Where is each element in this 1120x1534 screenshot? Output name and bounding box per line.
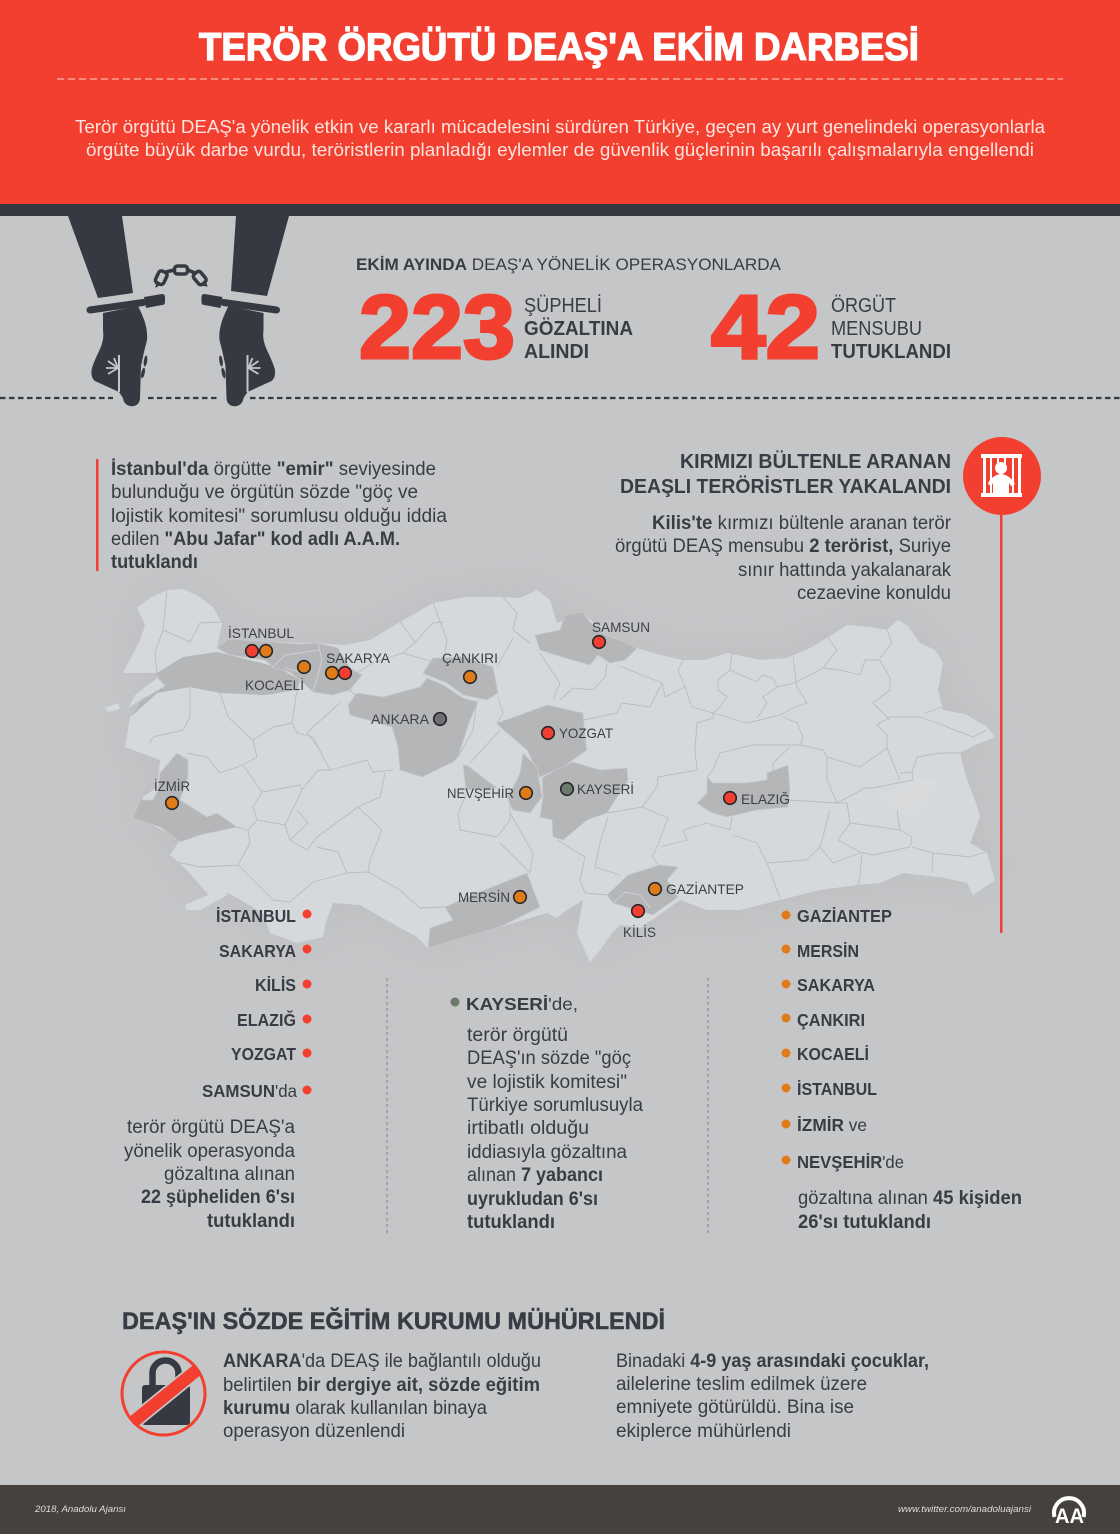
panel: right list: İSTANBUL [797, 1079, 877, 1099]
panel: left list: SAMSUN'da [202, 1081, 297, 1101]
stats heading: EKİM AYINDA DEAŞ'A YÖNELİK OPERASYONLARDA [356, 255, 782, 274]
left cuff and hand [90, 294, 165, 406]
map point labels: ÇANKIRI [442, 650, 498, 666]
panel: middle Kayseri text: DEAŞ'ın sözde "göç [467, 1048, 631, 1069]
text: operation in Ankara [223, 1351, 541, 1442]
stat: 223 detained: 223 [359, 278, 515, 378]
intro text: örgüte büyük darbe vurdu, teröristlerin planladığı eylemler de güvenlik güçlerinin başarılı çalışmalarıyla engellendi [86, 140, 1034, 160]
map point labels: SAKARYA [326, 650, 391, 666]
text: children delivered: Binadaki 4-9 yaş arasındaki çocuklar, [616, 1351, 929, 1372]
panel: left list: KİLİS [255, 975, 296, 995]
panel: right list: NEVŞEHİR'de [797, 1152, 904, 1172]
panel: left list: tutuklandı [207, 1211, 295, 1232]
right cuff and hand [202, 294, 276, 406]
map point labels: İSTANBUL [228, 624, 294, 641]
heading: red bulletin: DEAŞLI TERÖRİSTLER YAKALANDI [620, 475, 951, 498]
highlighted provinces [133, 612, 790, 948]
map point labels: KAYSERİ [577, 780, 634, 797]
panel: left list: ELAZIĞ [237, 1009, 296, 1030]
panel: left list [124, 906, 312, 1232]
panel: right list: İZMİR ve [797, 1115, 867, 1135]
callout: Abu Jafar: edilen "Abu Jafar" kod adlı A.A.M. [111, 529, 400, 550]
icon: handcuffed hands [68, 216, 289, 406]
map point labels: NEVŞEHİR [447, 784, 514, 801]
Sea of Marmara [132, 652, 300, 716]
lake Van [880, 778, 940, 815]
stat: 42 arrested: 42 [711, 278, 820, 378]
panel: left list: YOZGAT [231, 1044, 296, 1064]
header band [0, 0, 1120, 216]
province borders [150, 590, 987, 908]
title: TERÖR ÖRGÜTÜ DEAŞ'A EKİM DARBESİ [199, 26, 919, 69]
stat: 223 detained: GÖZALTINA [524, 317, 633, 340]
panel: middle Kayseri text: terör örgütü [467, 1025, 568, 1046]
map point labels: KOCAELİ [245, 676, 304, 693]
map point labels: ANKARA [371, 711, 430, 727]
panel: right list: 26'sı tutuklandı [798, 1212, 931, 1233]
text: children delivered: ekiplerce mühürlendi [616, 1421, 791, 1442]
panel: left list: İSTANBUL [216, 906, 296, 926]
map point labels: GAZİANTEP [666, 880, 744, 897]
panel: middle Kayseri text [450, 994, 643, 1233]
callout: Abu Jafar [96, 459, 447, 573]
panel: left list: SAKARYA [219, 941, 296, 961]
panel: right list: GAZİANTEP [797, 906, 892, 926]
heading: red bulletin [620, 450, 951, 498]
intro text: Terör örgütü DEAŞ'a yönelik etkin ve kararlı mücadelesini sürdüren Türkiye, geçen ay yurt genelindeki operasyonlarla [75, 117, 1046, 137]
intro text [75, 117, 1046, 160]
stat: 42 arrested: TUTUKLANDI [831, 341, 951, 363]
heading: sealed education institution: DEAŞ'IN SÖZDE EĞİTİM KURUMU MÜHÜRLENDİ [122, 1307, 665, 1335]
footer: 2018, Anadolu Ajansı [34, 1504, 126, 1515]
map point labels [154, 619, 790, 940]
panel: right list [782, 906, 1022, 1233]
panel: middle Kayseri text: alınan 7 yabancı [467, 1165, 603, 1186]
dotted divider [0, 397, 1120, 399]
stat: 42 arrested [711, 278, 951, 378]
callout: Abu Jafar: lojistik komitesi" sorumlusu olduğu iddia [111, 506, 447, 527]
map of Turkey [105, 589, 995, 962]
map point labels: YOZGAT [559, 725, 613, 741]
logo: Anadolu Agency: AA [1055, 1505, 1084, 1528]
panel: middle Kayseri text: ve lojistik komitesi" [467, 1072, 627, 1093]
callout: Abu Jafar: tutuklandı [111, 552, 198, 573]
icon: crossed out lock [122, 1352, 205, 1435]
panel: right list: SAKARYA [797, 975, 875, 995]
text: Kilis red bulletin [615, 513, 952, 604]
map point labels: ELAZIĞ [741, 791, 790, 807]
text: operation in Ankara: belirtilen bir dergiye ait, sözde eğitim [223, 1375, 540, 1396]
text: operation in Ankara: kurumu olarak kullanılan binaya [223, 1398, 487, 1419]
stat: 42 arrested: ÖRGÜT [831, 295, 896, 317]
text: children delivered: ailelerine teslim edilmek üzere [616, 1374, 867, 1395]
text: operation in Ankara: operasyon düzenlendi [223, 1421, 405, 1442]
stat: 223 detained [359, 278, 633, 378]
stat: 42 arrested: MENSUBU [831, 318, 922, 340]
panel: middle Kayseri text: tutuklandı [467, 1212, 555, 1233]
panel: right list: gözaltına alınan 45 kişiden [798, 1188, 1022, 1209]
panel: right list: ÇANKIRI [797, 1010, 865, 1030]
text: Kilis red bulletin: örgütü DEAŞ mensubu 2 terörist, Suriye [615, 536, 951, 557]
footer [0, 1485, 1120, 1534]
text: children delivered: emniyete götürüldü. Bina ise [616, 1397, 854, 1418]
broken chain [154, 266, 207, 287]
panel: middle Kayseri text: KAYSERİ 'de, [466, 994, 578, 1014]
panel: middle Kayseri text: iddiasıyla gözaltına [467, 1142, 627, 1163]
panel: middle Kayseri text: Türkiye sorumlusuyla [467, 1095, 643, 1116]
text: operation in Ankara: ANKARA'da DEAŞ ile bağlantılı olduğu [223, 1351, 541, 1372]
panel: right list: KOCAELİ [797, 1044, 869, 1064]
panel: left list: 22 şüpheliden 6'sı [141, 1187, 295, 1208]
map point labels: MERSİN [458, 888, 510, 905]
map point markers [166, 636, 736, 917]
stat: 223 detained: ŞÜPHELİ [524, 294, 602, 317]
text: Kilis red bulletin: sınır hattında yakalanarak [738, 560, 951, 581]
text: Kilis red bulletin: cezaevine konuldu [797, 583, 951, 604]
map point labels: KİLİS [623, 923, 656, 940]
panel: left list: yönelik operasyonda [124, 1141, 295, 1162]
footer: www.twitter.com/anadoluajansi [898, 1504, 1032, 1515]
callout: Abu Jafar: İstanbul'da örgütte "emir" seviyesinde [111, 459, 436, 480]
panel: middle Kayseri text: irtibatlı olduğu [467, 1118, 589, 1139]
panel: left list: terör örgütü DEAŞ'a [127, 1117, 295, 1138]
land [123, 589, 995, 962]
stat: 223 detained: ALINDI [524, 341, 589, 363]
map point labels: SAMSUN [592, 619, 650, 635]
text: Kilis red bulletin: Kilis'te kırmızı bültenle aranan terör [652, 513, 952, 534]
heading: red bulletin: KIRMIZI BÜLTENLE ARANAN [680, 450, 951, 473]
panel: right list: MERSİN [797, 941, 859, 961]
text: children delivered [616, 1351, 929, 1442]
panel: middle Kayseri text: uyrukludan 6'sı [467, 1189, 598, 1210]
callout: Abu Jafar: bulunduğu ve örgütün sözde "göç ve [111, 482, 418, 503]
icon: prisoner behind bars [963, 437, 1041, 933]
map point labels: İZMİR [154, 777, 190, 794]
panel: left list: gözaltına alınan [164, 1164, 295, 1185]
